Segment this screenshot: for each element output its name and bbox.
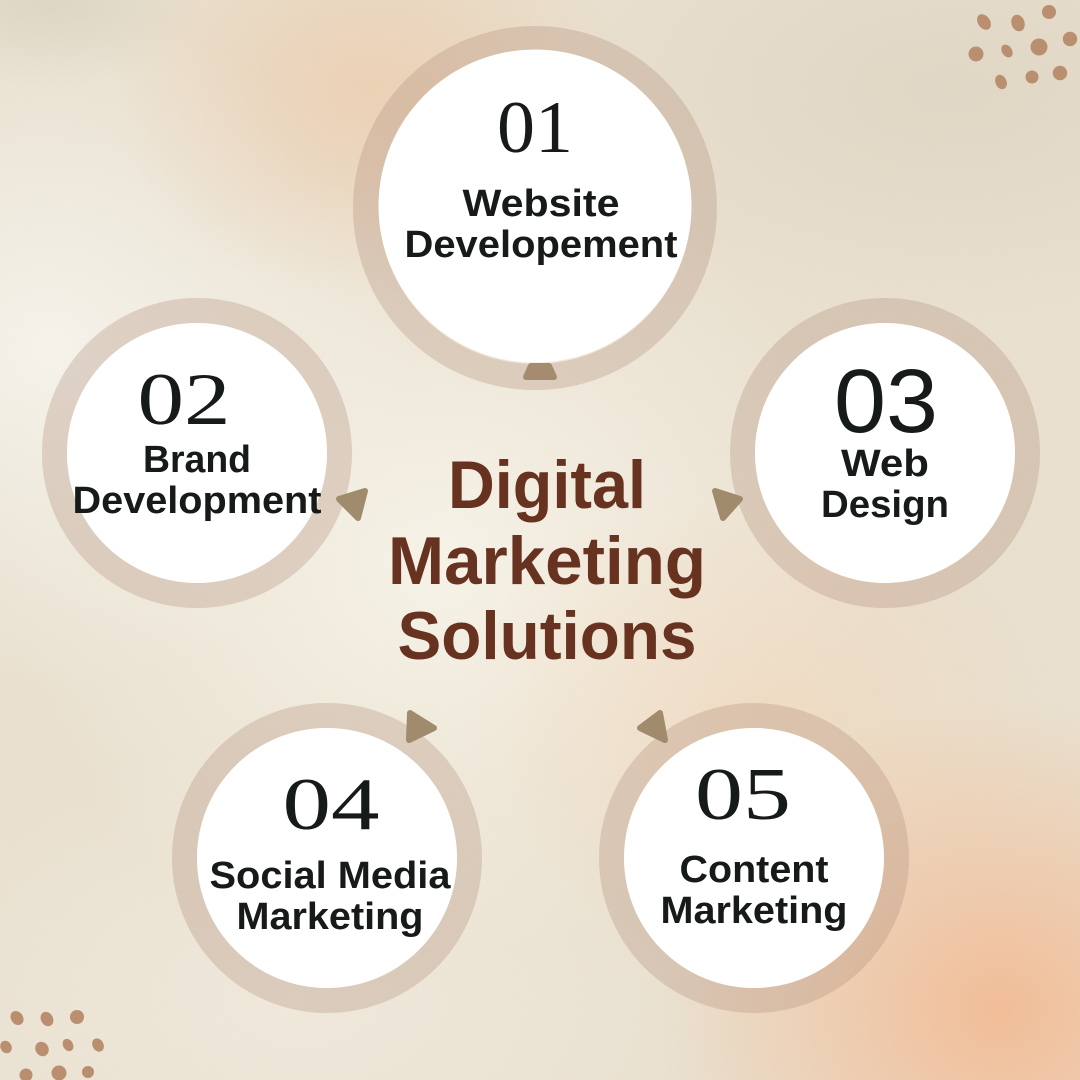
title: Digital xyxy=(448,447,646,523)
label: Social Media xyxy=(210,855,451,897)
number 02: 02 xyxy=(138,359,230,441)
arrow: to node 02 xyxy=(339,491,365,518)
number 03: 03 xyxy=(834,352,938,452)
label: Brand xyxy=(143,439,251,481)
label: Website xyxy=(462,183,620,225)
node 05: Content Marketing xyxy=(612,716,896,1000)
node 03: Web Design xyxy=(742,310,1028,596)
node 01: Website Developement xyxy=(366,39,704,377)
number 04: 04 xyxy=(282,764,380,846)
arrow: to node 03 xyxy=(715,491,740,518)
label: Marketing xyxy=(660,890,848,932)
number 01: 01 xyxy=(497,87,573,169)
label: Content xyxy=(680,849,829,891)
node 02: Brand Development xyxy=(54,310,340,596)
node 04: Social Media Marketing xyxy=(184,716,470,1000)
decorative dots: bottom left xyxy=(0,1008,106,1080)
arrow: to node 04 xyxy=(409,713,434,740)
arrow: to node 05 xyxy=(640,713,665,740)
label: Design xyxy=(821,484,949,526)
decorative dots: top right xyxy=(968,5,1077,91)
label: Web xyxy=(841,443,929,485)
title: Marketing xyxy=(388,523,706,599)
label: Developement xyxy=(404,224,678,266)
arrow: to node 01 xyxy=(526,366,554,377)
title: Solutions xyxy=(398,598,696,674)
label: Marketing xyxy=(236,896,424,938)
label: Development xyxy=(72,480,322,522)
number 05: 05 xyxy=(695,754,791,836)
